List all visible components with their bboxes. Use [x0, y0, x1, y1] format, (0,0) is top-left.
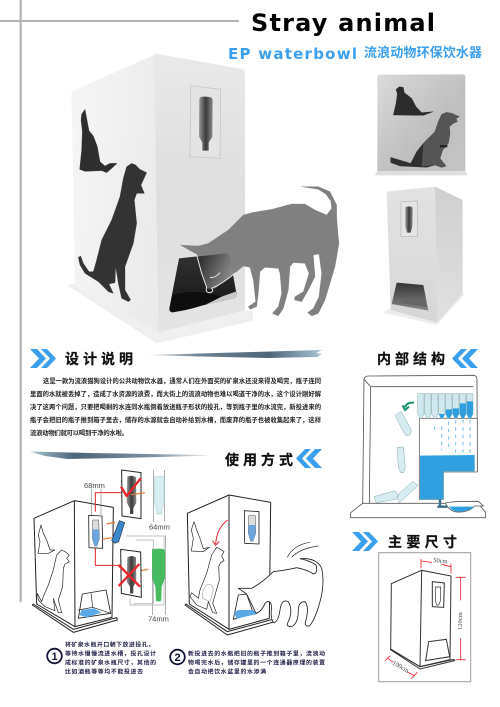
side opening — [392, 283, 428, 311]
opening outline — [426, 639, 450, 661]
side left face — [387, 187, 437, 323]
subtitle english: EP waterbowl — [228, 45, 357, 63]
cat outline — [191, 522, 209, 552]
side bowl — [398, 299, 427, 307]
section header: usage — [30, 449, 322, 468]
check mark — [121, 478, 141, 496]
water in bottles — [439, 401, 473, 418]
side base — [383, 292, 464, 325]
label 100cm: 100cm — [391, 660, 410, 675]
heading: 使用方式 — [225, 452, 293, 468]
number badge 2 — [170, 650, 185, 664]
step 2 text: 新投进去的水瓶把旧的瓶子推到箱子里，流浪动 — [188, 650, 325, 658]
gradient bar — [146, 350, 322, 358]
good bottle slot — [122, 470, 141, 519]
measure lines — [92, 470, 166, 615]
standing dog silhouette — [179, 187, 339, 316]
product left face — [71, 55, 158, 333]
description paragraph: 流浪动物们就可以喝到干净的水啦。 — [30, 428, 128, 437]
drinking bowl opening — [169, 253, 237, 312]
water tank — [419, 418, 477, 499]
pale inner outline — [202, 584, 213, 602]
subtitle chinese: 流浪动物环保饮水器 — [364, 45, 482, 60]
step 1 text — [65, 640, 156, 676]
step 1 text: 等待水慢慢流进水槽，投孔设计 — [65, 650, 156, 658]
blue tilted bottle — [112, 521, 125, 543]
main product render — [67, 54, 339, 343]
step 1 caption — [47, 640, 156, 676]
internal structure diagram — [351, 375, 486, 518]
connecting pipe — [437, 499, 447, 507]
cat silhouette — [80, 109, 117, 173]
step 1 text: 成标准的矿泉水瓶尺寸，其他的 — [65, 658, 156, 666]
side right face — [435, 187, 463, 323]
front dog — [391, 112, 459, 167]
dimension label 64mm: 64mm — [149, 522, 170, 532]
product base — [67, 283, 253, 343]
slot with bottle — [244, 511, 259, 544]
dog outline — [190, 547, 224, 613]
heading: 设计说明 — [65, 351, 133, 367]
bad bottle slot — [121, 549, 141, 597]
side slot — [401, 201, 417, 237]
cabinet outline — [185, 495, 275, 635]
gradient bar — [30, 452, 207, 459]
tail motion lines — [287, 542, 318, 557]
section header: internal structure — [377, 349, 478, 368]
cabinet section outline — [351, 375, 486, 518]
front view render — [375, 74, 467, 175]
usage step 1 diagram — [32, 470, 166, 632]
red arrow — [213, 520, 228, 545]
chevrons — [30, 349, 56, 368]
step 2 text — [188, 650, 325, 676]
step 1 text: 将矿泉水瓶开口朝下放进投孔， — [65, 640, 154, 648]
product right face — [154, 54, 245, 333]
chevrons — [296, 449, 322, 468]
guide frame — [126, 536, 164, 605]
pale bottle — [154, 477, 164, 514]
dimension label 68mm: 68mm — [84, 481, 105, 490]
description paragraph — [30, 376, 322, 437]
dimension label 74mm: 74mm — [148, 614, 169, 624]
front cat — [393, 87, 433, 115]
cabinet outline — [390, 570, 455, 669]
section header: design description — [30, 349, 322, 368]
dimensions diagram — [379, 553, 471, 682]
red connectors — [95, 493, 122, 565]
falling drops — [435, 420, 470, 455]
falling bottles — [374, 411, 418, 503]
step 2 text: 会自动把饮水盆里的水添满 — [188, 668, 266, 676]
chevrons — [352, 532, 378, 551]
description paragraph: 里面的水就被丢掉了，造成了水资源的浪费，而大街上的流浪动物也难以喝道干净的水，这个设计刚好解 — [30, 389, 322, 398]
opening with water — [233, 594, 257, 619]
heading: 主要尺寸 — [388, 534, 457, 550]
chevrons — [452, 349, 478, 368]
label 50cm: 50cm — [433, 557, 448, 565]
number badge 1: 1 — [51, 651, 58, 663]
side bottle — [405, 206, 413, 233]
green bottle — [152, 549, 165, 602]
bottle row — [418, 394, 473, 418]
number badge 2: 2 — [174, 652, 181, 664]
opening with water — [78, 590, 111, 618]
description paragraph: 这是一款为流浪猫狗设计的公共动物饮水器，通常人们在外面买的矿泉水还没来得及喝完，瓶子连同 — [43, 376, 321, 385]
orange arrows — [102, 493, 148, 572]
description paragraph: 决了这两个问题，只要把喝剩的水连同水瓶倒着放进瓶子形状的投孔，等到瓶子里的水流完，新投进来的 — [30, 402, 321, 411]
step 2 text: 物喝完水后，储存罐里的一个连通器原理的装置 — [188, 658, 325, 666]
cat outline — [38, 525, 55, 553]
bottle slot — [190, 86, 221, 158]
step 1 text: 比如酒瓶等等均不能投进去 — [65, 668, 143, 676]
heading: 内部结构 — [377, 351, 445, 367]
title: Stray animal — [251, 9, 435, 37]
red cross — [119, 564, 140, 587]
slot with bottle — [89, 515, 103, 548]
front panel — [377, 74, 465, 172]
slot outline — [432, 582, 444, 607]
frame lines — [0, 0, 239, 602]
cabinet outline — [32, 501, 117, 632]
side view render — [383, 187, 464, 325]
section header: main dimensions — [352, 532, 457, 551]
usage step 2 diagram — [185, 495, 323, 635]
front base — [375, 171, 467, 175]
dog outline — [37, 550, 69, 613]
label 120cm: 120cm — [457, 612, 464, 630]
step 2 caption — [170, 650, 325, 676]
diagram frame — [379, 553, 471, 682]
green arrow — [403, 403, 414, 410]
standing dog outline — [238, 559, 323, 627]
drinking bowl — [445, 501, 483, 512]
description paragraph: 瓶子会把旧的瓶子推到箱子里去，储存的水源就会自动补给到水槽，而废弃的瓶子也被收集起来了，这样 — [30, 415, 322, 424]
dog head inside opening — [197, 253, 233, 288]
sitting dog silhouette — [78, 163, 147, 302]
dog head outline — [179, 245, 236, 293]
red dimension lines — [385, 559, 466, 679]
